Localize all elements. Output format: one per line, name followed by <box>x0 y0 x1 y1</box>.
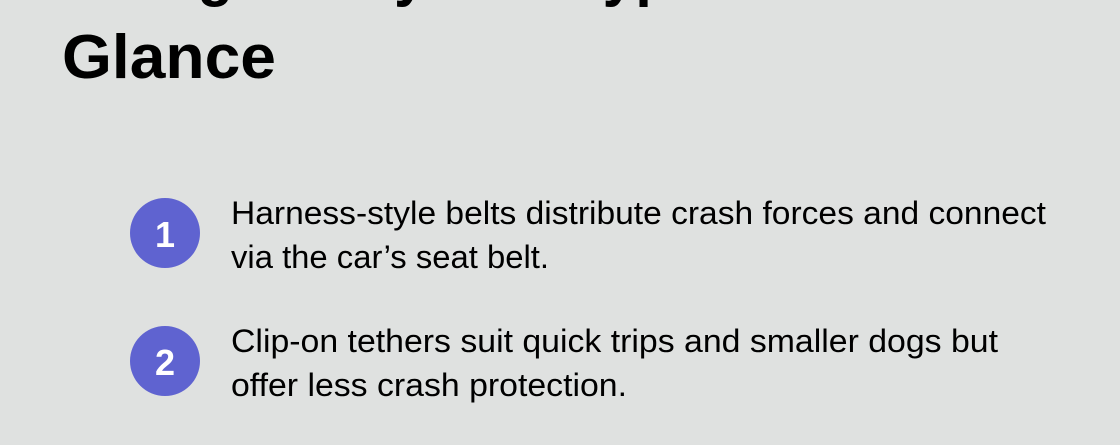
text: harness-style belts: via the car’s seat belt. <box>231 239 549 275</box>
title: Glance <box>62 23 276 92</box>
number badge 2 <box>130 326 200 396</box>
number badge 2: 2 <box>155 342 175 383</box>
text: clip-on tethers: Clip-on tethers suit quick trips and smaller dogs but <box>231 323 998 359</box>
list item 1 <box>130 195 1046 275</box>
list item 2 <box>130 323 998 403</box>
text: clip-on tethers <box>231 323 998 403</box>
number badge 1 <box>130 198 200 268</box>
number badge 1: 1 <box>155 214 175 255</box>
text: clip-on tethers: offer less crash protection. <box>231 367 627 403</box>
title <box>62 0 855 92</box>
text: harness-style belts <box>231 195 1046 275</box>
text: harness-style belts: Harness-style belts distribute crash forces and connect <box>231 195 1046 231</box>
